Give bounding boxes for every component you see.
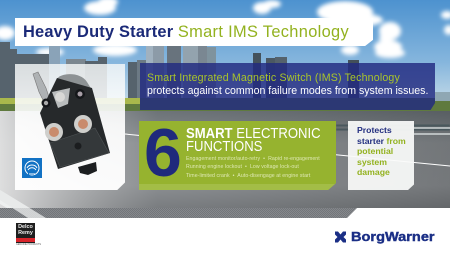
- BorgWarner wordmark: BorgWarner: [351, 229, 435, 244]
- logo: Delco Remy: [16, 223, 41, 246]
- logo wordmark: Delco: [18, 224, 33, 230]
- panel: protects starter callout: [348, 121, 414, 190]
- function list: Running engine lockout • Low voltage lock-out: [186, 164, 299, 170]
- IMS body line: protects against common failure modes from system issues.: [147, 85, 428, 97]
- function list: [186, 156, 320, 178]
- callout text: starter from: [357, 136, 406, 146]
- icon: starter solenoid: [32, 72, 110, 175]
- function heading: SMART ELECTRONIC: [186, 126, 321, 142]
- function list: Time-limited crank • Auto-disengage at engine start: [186, 173, 310, 179]
- title banner: [15, 18, 373, 46]
- title text: Heavy Duty Starter Smart IMS Technology: [23, 23, 349, 41]
- panel: product photo: [15, 64, 125, 190]
- logo mark: [16, 223, 35, 243]
- callout text: [357, 127, 406, 176]
- panel: IMS description: [140, 63, 435, 110]
- logo red bar: [16, 238, 35, 242]
- hatched base strip: [139, 184, 336, 190]
- panel: 6 smart electronic functions: [139, 121, 336, 190]
- icon: blue IMS badge: [22, 158, 42, 178]
- callout text: potential: [357, 146, 393, 156]
- logo: BorgWarner: [335, 229, 435, 244]
- icon: BorgWarner mark: [335, 232, 346, 242]
- function heading: [186, 128, 320, 151]
- callout text: Protects: [357, 125, 392, 135]
- function heading: FUNCTIONS: [186, 139, 262, 155]
- logo wordmark: Remy: [18, 230, 33, 236]
- IMS heading line: Smart Integrated Magnetic Switch (IMS) Technology: [147, 72, 400, 84]
- callout text: damage: [357, 167, 390, 177]
- callout text: system: [357, 156, 387, 166]
- logo wordmark: [18, 224, 33, 236]
- big number 6: 6: [144, 115, 182, 191]
- function list: Engagement monitor/auto-retry • Rapid re-engagement: [186, 156, 320, 162]
- logo tagline: GENUINE PRODUCTS: [16, 243, 41, 246]
